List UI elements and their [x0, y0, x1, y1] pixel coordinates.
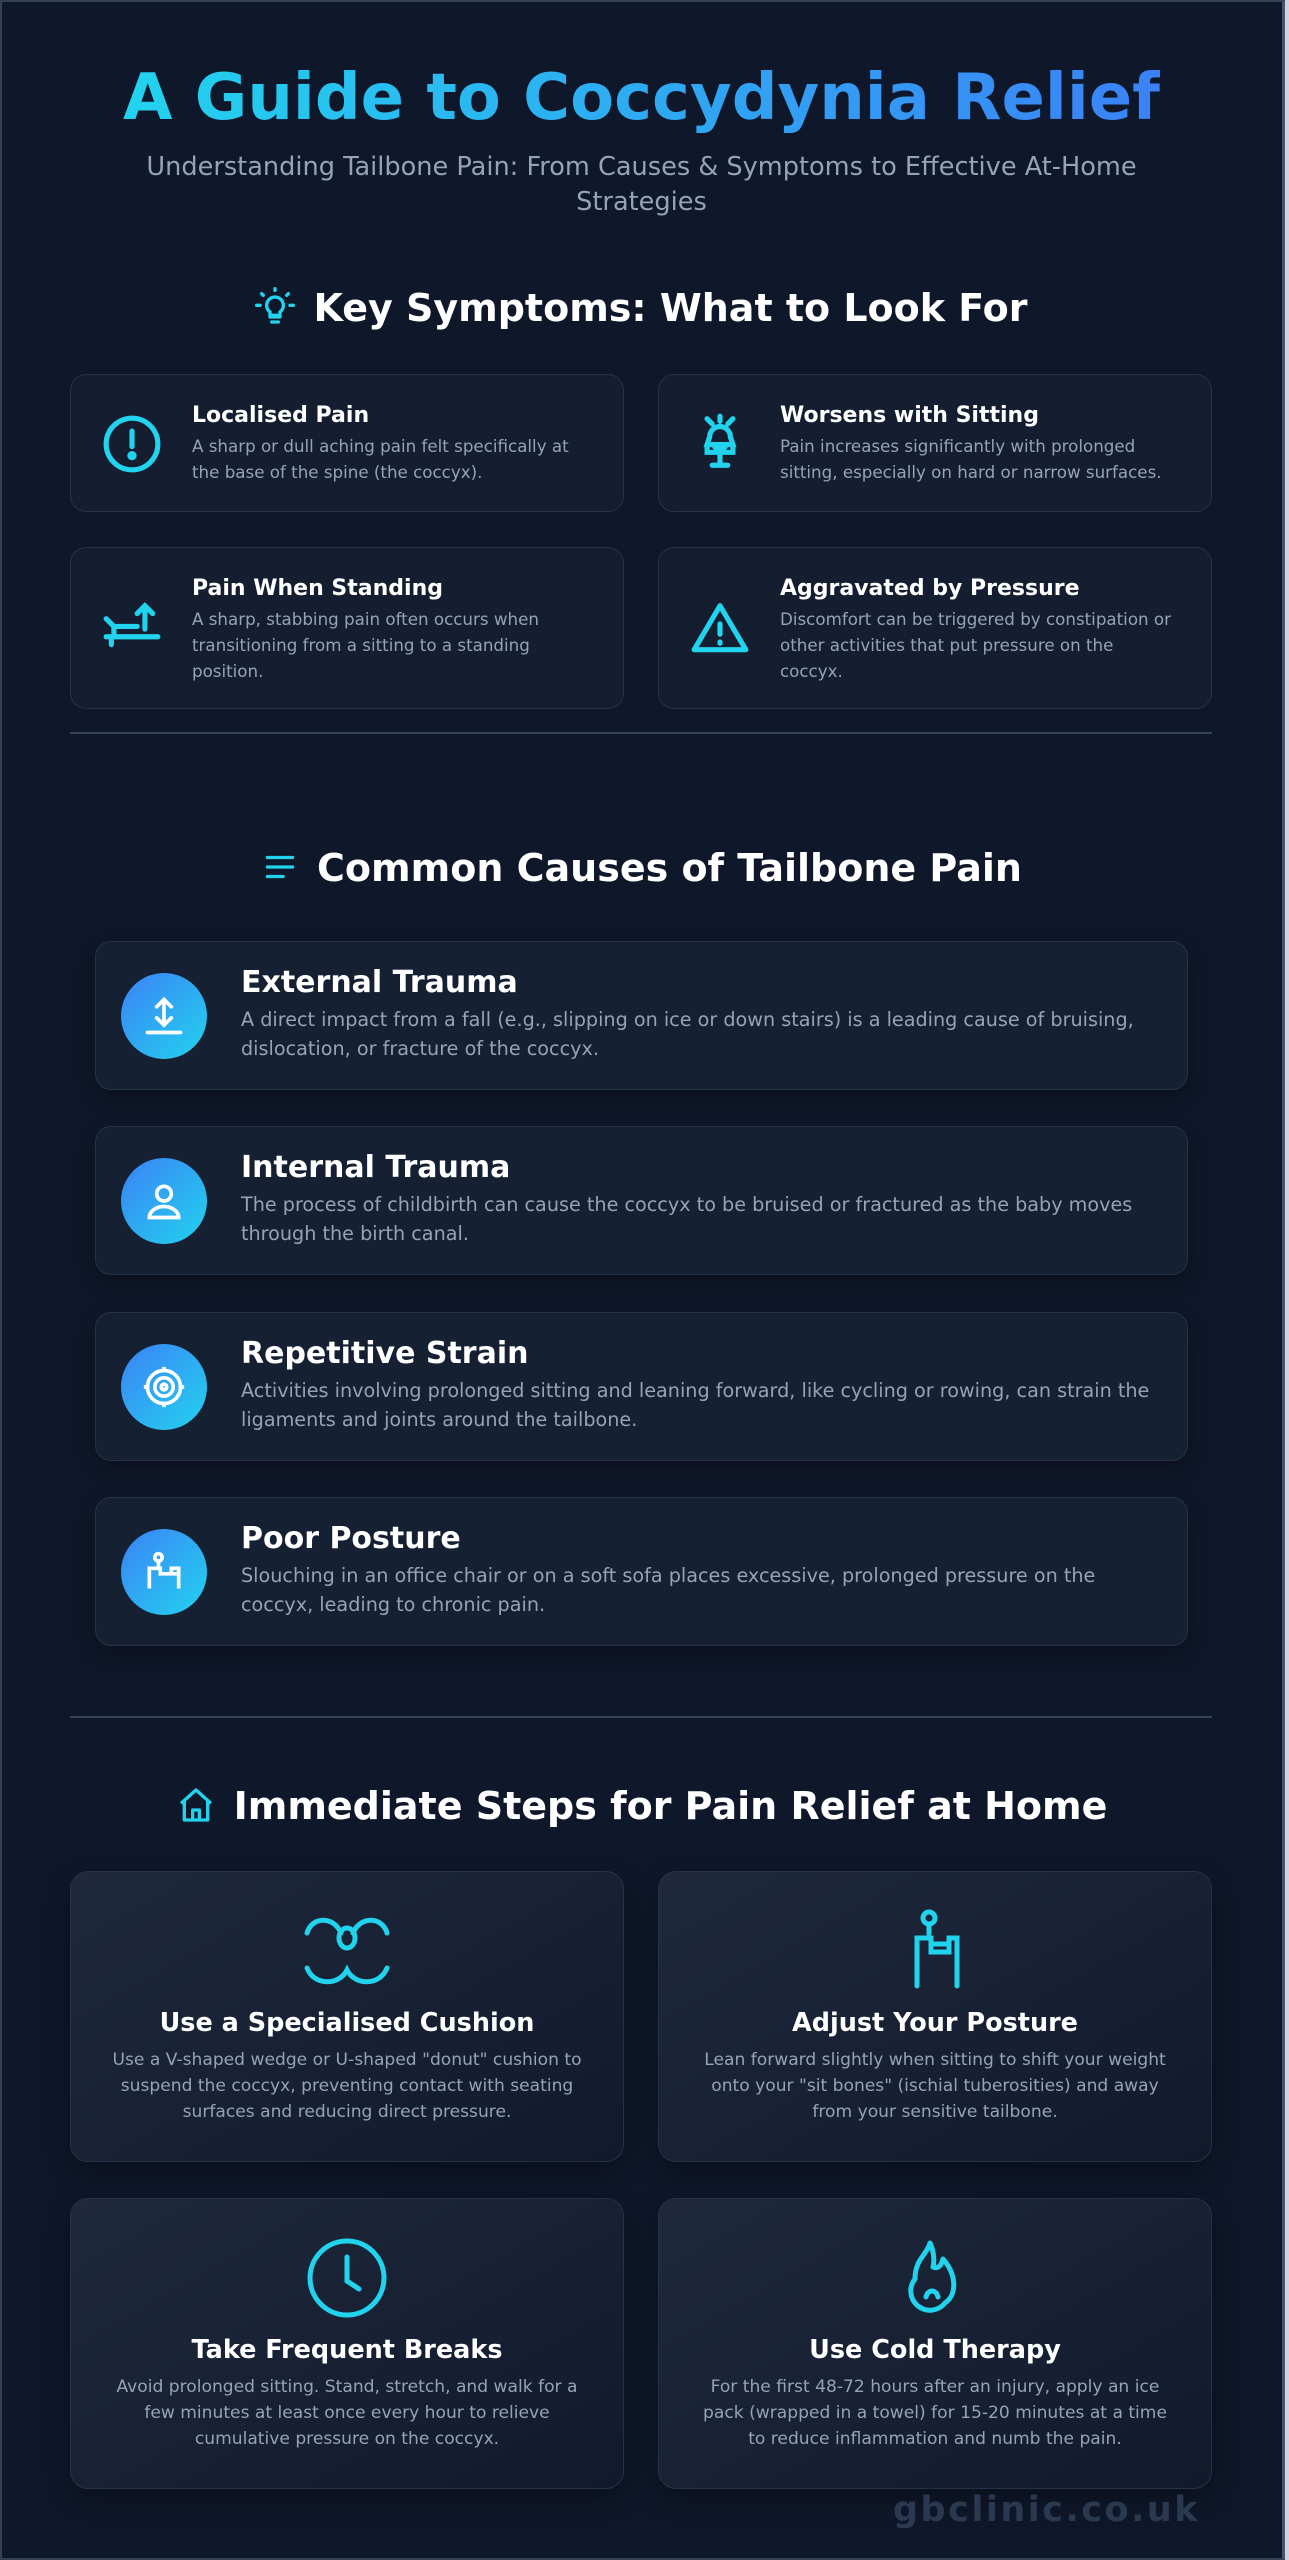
panel: external trauma: External Trauma: [241, 965, 518, 1000]
panel: posture: onto your "sit bones" (ischial tuberosities) and away: [711, 2076, 1159, 2096]
panel: pain when standing: A sharp, stabbing pain often occurs when: [192, 609, 539, 629]
panel: external trauma: A direct impact from a fall (e.g., slipping on ice or down stairs) is a leading cause of bruising,: [241, 1008, 1134, 1031]
panel: aggravated by pressure: coccyx.: [780, 661, 843, 681]
heading: key symptoms: Key Symptoms: What to Look For: [313, 286, 1028, 330]
panel: repetitive strain: ligaments and joints around the tailbone.: [241, 1408, 637, 1431]
panel: breaks: Avoid prolonged sitting. Stand, stretch, and walk for a: [116, 2377, 578, 2397]
watermark: gbclinic.co.uk: [893, 2490, 1200, 2530]
panel: cushion: suspend the coccyx, preventing contact with seating: [121, 2076, 573, 2096]
heading: common causes: Common Causes of Tailbone Pain: [317, 846, 1022, 890]
panel: cold therapy: Use Cold Therapy: [809, 2335, 1061, 2365]
panel: poor posture: [95, 1497, 1188, 1646]
panel: posture: [658, 1871, 1212, 2162]
panel: worsens with sitting: Worsens with Sitting: [780, 403, 1039, 428]
panel: external trauma: [95, 941, 1188, 1090]
panel: repetitive strain: Repetitive Strain: [241, 1336, 528, 1371]
panel: pain when standing: [70, 547, 624, 709]
panel: cushion: Use a V-shaped wedge or U-shaped "donut" cushion to: [112, 2050, 582, 2070]
panel: cold therapy: to reduce inflammation and numb the pain.: [748, 2429, 1122, 2449]
panel: repetitive strain: [95, 1312, 1188, 1461]
icon: seated person: [121, 1529, 207, 1615]
panel: aggravated by pressure: other activities that put pressure on the: [780, 635, 1113, 655]
panel: breaks: cumulative pressure on the coccyx.: [195, 2429, 499, 2449]
panel: aggravated by pressure: Discomfort can be triggered by constipation or: [780, 609, 1171, 629]
panel: cold therapy: For the first 48-72 hours after an injury, apply an ice: [711, 2377, 1159, 2397]
panel: localised pain: [70, 374, 624, 512]
panel: poor posture: Slouching in an office chair or on a soft sofa places excessive, prolonged pressure on the: [241, 1564, 1095, 1587]
icon: impact arrows: [121, 973, 207, 1059]
panel: breaks: few minutes at least once every hour to relieve: [144, 2403, 550, 2423]
panel: breaks: Take Frequent Breaks: [192, 2335, 502, 2365]
panel: external trauma: dislocation, or fracture of the coccyx.: [241, 1037, 599, 1060]
icon: warning triangle: [692, 603, 748, 652]
icon: chair arrow: [104, 602, 160, 648]
icon: target: [121, 1344, 207, 1430]
panel: worsens with sitting: [658, 374, 1212, 512]
panel: localised pain: A sharp or dull aching pain felt specifically at: [192, 436, 569, 456]
panel: cushion: surfaces and reducing direct pressure.: [183, 2102, 511, 2122]
title: A Guide to Coccydynia Relief: [123, 61, 1160, 135]
panel: localised pain: Localised Pain: [192, 403, 369, 428]
panel: poor posture: Poor Posture: [241, 1521, 461, 1556]
subtitle: Understanding Tailbone Pain: From Causes & Symptoms to Effective At-Home Strategies: [146, 152, 1137, 217]
panel: localised pain: the base of the spine (the coccyx).: [192, 462, 482, 482]
icon: alarm seat: [704, 414, 736, 468]
icon: cushion: [304, 1918, 390, 1984]
panel: internal trauma: Internal Trauma: [241, 1150, 510, 1185]
panel: cushion: Use a Specialised Cushion: [160, 2008, 534, 2038]
panel: repetitive strain: Activities involving prolonged sitting and leaning forward, like cycling or rowing, can strain the: [241, 1379, 1149, 1402]
panel: cushion: [70, 1871, 624, 2162]
panel: posture: Lean forward slightly when sitting to shift your weight: [704, 2050, 1166, 2070]
icon: person: [121, 1158, 207, 1244]
panel: aggravated by pressure: [658, 547, 1212, 709]
panel: aggravated by pressure: Aggravated by Pressure: [780, 576, 1080, 601]
panel: internal trauma: through the birth canal.: [241, 1222, 469, 1245]
icon: flame: [908, 2240, 956, 2313]
panel: pain when standing: Pain When Standing: [192, 576, 443, 601]
panel: breaks: [70, 2198, 624, 2489]
panel: pain when standing: position.: [192, 661, 263, 681]
icon: alert circle: [104, 416, 160, 472]
panel: posture: Adjust Your Posture: [792, 2008, 1078, 2038]
heading: immediate steps: Immediate Steps for Pain Relief at Home: [234, 1784, 1107, 1828]
panel: posture: from your sensitive tailbone.: [812, 2102, 1058, 2122]
panel: worsens with sitting: sitting, especially on hard or narrow surfaces.: [780, 462, 1162, 482]
panel: poor posture: coccyx, leading to chronic pain.: [241, 1593, 545, 1616]
panel: cold therapy: [658, 2198, 1212, 2489]
icon: posture: [914, 1910, 960, 1988]
panel: worsens with sitting: Pain increases significantly with prolonged: [780, 436, 1135, 456]
panel: pain when standing: transitioning from a sitting to a standing: [192, 635, 530, 655]
panel: cold therapy: pack (wrapped in a towel) for 15-20 minutes at a time: [703, 2403, 1167, 2423]
icon: clock: [308, 2238, 386, 2318]
panel: internal trauma: The process of childbirth can cause the coccyx to be bruised or fractured as the baby moves: [241, 1193, 1132, 1216]
panel: internal trauma: [95, 1126, 1188, 1275]
